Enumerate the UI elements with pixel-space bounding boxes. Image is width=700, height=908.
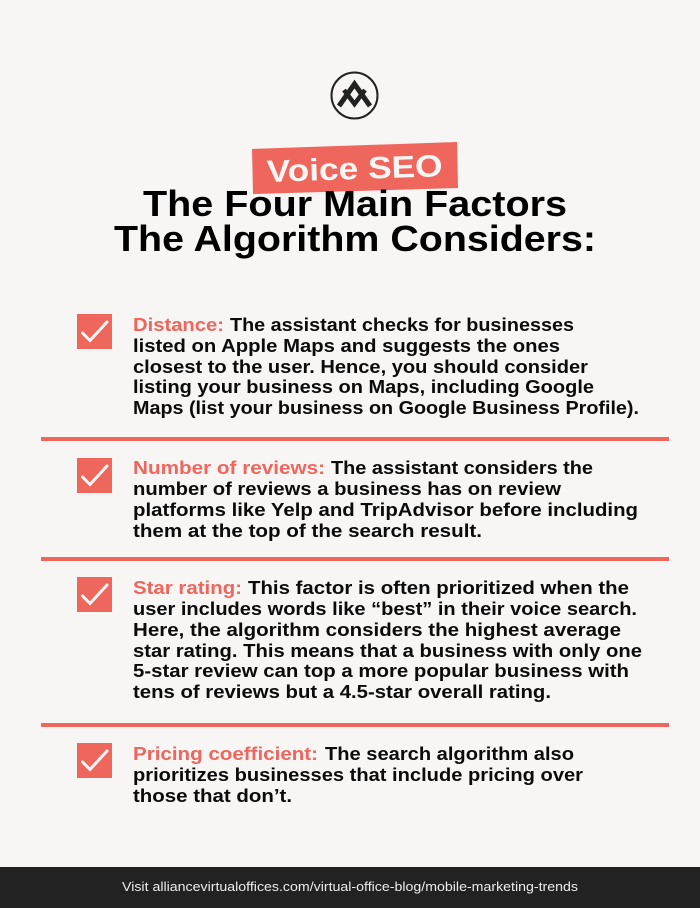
text: distance: Maps (list your business on Google Business Profile). [133, 397, 639, 418]
footer text: Visit alliancevirtualoffices.com/virtual-office-blog/mobile-marketing-trends [122, 880, 578, 894]
icon: checkbox [77, 743, 112, 778]
badge: Voice SEO [252, 142, 458, 194]
text: pricing: The search algorithm also [325, 743, 574, 764]
text: distance: listed on Apple Maps and suggests the ones [133, 335, 560, 356]
icon: checkbox [77, 458, 112, 493]
text: pricing: Pricing coefficient: [133, 743, 318, 764]
text: pricing [133, 743, 583, 806]
divider [41, 723, 669, 727]
text: distance: Distance: [133, 314, 224, 335]
text: star rating [133, 577, 642, 702]
text: distance: closest to the user. Hence, you should consider [133, 356, 588, 377]
text: distance: The assistant checks for businesses [230, 314, 574, 335]
text: star rating: 5-star review can top a more popular business with [133, 660, 629, 681]
item: distance [77, 314, 639, 418]
divider [41, 557, 669, 561]
text: star rating: tens of reviews but a 4.5-star overall rating. [133, 681, 551, 702]
divider [41, 437, 669, 441]
title: The Four Main Factors [143, 183, 567, 224]
text: reviews [133, 457, 638, 541]
text: reviews: them at the top of the search result. [133, 520, 482, 541]
title: The Algorithm Considers: [114, 218, 596, 259]
title [114, 183, 596, 259]
footer bar [0, 867, 700, 908]
text: reviews: platforms like Yelp and TripAdvisor before including [133, 499, 638, 520]
text: star rating: Star rating: [133, 577, 242, 598]
item: star rating [77, 577, 642, 702]
text: reviews: number of reviews a business has on review [133, 478, 562, 499]
text: pricing: prioritizes businesses that include pricing over [133, 764, 583, 785]
item: number of reviews [77, 457, 638, 541]
text: pricing: those that don’t. [133, 785, 292, 806]
text: star rating: star rating. This means that a business with only one [133, 640, 642, 661]
text: reviews: The assistant considers the [331, 457, 593, 478]
item: pricing coefficient [77, 743, 583, 806]
icon: logo [332, 72, 378, 118]
badge: Voice SEO: Voice SEO [266, 148, 443, 189]
icon: checkbox [77, 577, 112, 612]
text: star rating: This factor is often prioritized when the [248, 577, 629, 598]
text: star rating: user includes words like “best” in their voice search. [133, 598, 637, 619]
text: distance [133, 314, 639, 418]
icon: checkbox [77, 314, 112, 349]
text: distance: listing your business on Maps, including Google [133, 376, 594, 397]
text: star rating: Here, the algorithm considers the highest average [133, 619, 621, 640]
text: reviews: Number of reviews: [133, 457, 325, 478]
